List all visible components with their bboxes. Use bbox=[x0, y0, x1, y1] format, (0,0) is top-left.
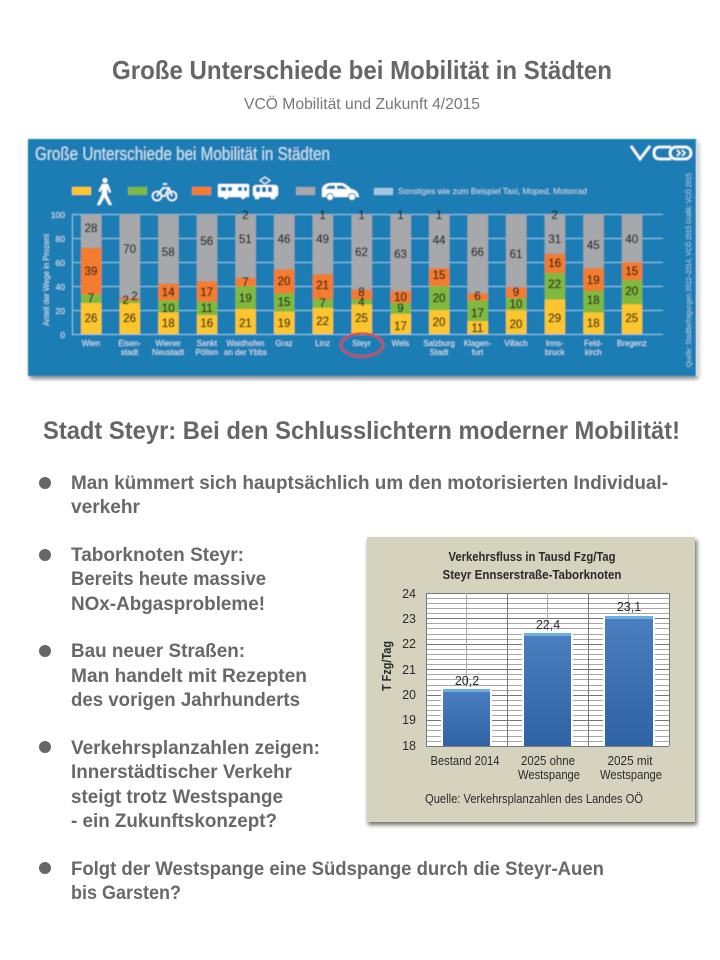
bar: Wiener Neustadt: Wiener bbox=[156, 339, 181, 348]
bar: Wels: 1 bbox=[397, 210, 404, 222]
bar: Feldkirch: 18 bbox=[587, 295, 600, 307]
bar: Salzburg: 1 bbox=[436, 210, 442, 222]
bar: Klagenfurt: 11 bbox=[472, 323, 483, 335]
bar: Villach: 20 bbox=[510, 319, 522, 331]
bar: Feldkirch: kirch bbox=[585, 348, 602, 357]
bar: Eisenstadt bbox=[118, 214, 141, 357]
legend bbox=[72, 177, 587, 205]
bar: Sankt Pölten bbox=[195, 214, 218, 357]
bar: Graz: 46 bbox=[278, 234, 290, 246]
bullet 2: NOx-Abgasprobleme! bbox=[71, 594, 265, 615]
bar: Bregenz: 20 bbox=[625, 286, 638, 298]
icon: bus bbox=[218, 184, 249, 199]
bar: Salzburg: 20 bbox=[433, 293, 445, 305]
bar: Waidhofen: an der Ybbs bbox=[224, 348, 267, 357]
bullet 2: Bereits heute massive bbox=[71, 569, 266, 590]
y axis labels: 22 bbox=[402, 637, 416, 651]
bullet 2 bbox=[39, 545, 266, 615]
bar: Wiener Neustadt: 10 bbox=[162, 303, 175, 315]
bar: Innsbruck: 2 bbox=[551, 210, 558, 222]
bar: 2025 mit Westspange: 23,1 bbox=[617, 600, 641, 614]
panel: city mobility chart bbox=[28, 139, 698, 379]
icon: pedestrian bbox=[97, 178, 112, 205]
bar: Wiener Neustadt bbox=[152, 214, 185, 357]
y axis labels: 23 bbox=[402, 612, 416, 626]
axis and grid: 60 bbox=[56, 258, 65, 268]
bar: Bestand 2014 bbox=[441, 674, 492, 746]
bar: Bregenz: 40 bbox=[625, 234, 638, 246]
bar: Sankt Pölten: 11 bbox=[201, 303, 213, 315]
bullet 5: Folgt der Westspange eine Südspange durch die Steyr-Auen bbox=[71, 859, 604, 880]
bar: Wien: 39 bbox=[85, 266, 97, 278]
bar: Wiener Neustadt: Neustadt bbox=[152, 348, 185, 357]
bullet 3: des vorigen Jahrhunderts bbox=[71, 690, 300, 711]
title: Große Unterschiede bei Mobilität in Städten bbox=[112, 55, 612, 85]
bullet 3: Bau neuer Straßen: bbox=[71, 641, 245, 662]
panel: traffic flow chart bbox=[367, 537, 697, 825]
bullet 4: - ein Zukunftskonzept? bbox=[71, 811, 277, 832]
plot grid bbox=[426, 593, 670, 746]
y axis labels: 20 bbox=[402, 688, 416, 702]
y axis labels bbox=[402, 587, 416, 753]
bar: Wien: 26 bbox=[85, 313, 97, 325]
axis and grid: 40 bbox=[56, 282, 65, 292]
bar: Klagenfurt: 66 bbox=[471, 247, 484, 259]
bullet 5: bis Garsten? bbox=[71, 883, 181, 904]
bar: Bregenz bbox=[617, 214, 647, 348]
bar: Villach: 61 bbox=[510, 249, 522, 261]
bar: Steyr bbox=[352, 210, 372, 348]
bullet 4: steigt trotz Westspange bbox=[71, 787, 283, 808]
bar: Wiener Neustadt: 58 bbox=[162, 247, 175, 259]
bar: Graz: 20 bbox=[278, 276, 290, 288]
bar: Bestand 2014: 20,2 bbox=[455, 674, 479, 688]
bar: Wien: 28 bbox=[85, 223, 97, 235]
axis and grid: 20 bbox=[56, 306, 65, 316]
icon: tram bbox=[253, 177, 278, 199]
chart title: Große Unterschiede bei Mobilität in Städten bbox=[35, 144, 330, 164]
bar: Salzburg: Stadt bbox=[430, 348, 449, 357]
bullet 1: verkehr bbox=[71, 497, 141, 518]
bar: Feldkirch bbox=[583, 214, 604, 357]
bar: Wels: 63 bbox=[394, 249, 407, 261]
bar: Bregenz: Bregenz bbox=[617, 339, 647, 348]
y axis labels: 21 bbox=[402, 663, 416, 677]
bar: Linz: 1 bbox=[319, 210, 326, 222]
bar: Villach: Villach bbox=[504, 339, 528, 348]
bar: Linz: 22 bbox=[316, 316, 329, 328]
bar: Innsbruck: bruck bbox=[545, 348, 565, 357]
bar: Graz: Graz bbox=[275, 339, 293, 348]
bar: Innsbruck: 29 bbox=[548, 313, 561, 325]
y axis labels: 19 bbox=[402, 713, 416, 727]
bar: Waidhofen: 51 bbox=[239, 234, 252, 246]
bar: Klagenfurt: furt bbox=[472, 348, 484, 357]
bullet 4: Innerstädtischer Verkehr bbox=[71, 762, 293, 783]
bar: Waidhofen: 7 bbox=[242, 277, 249, 289]
bar: Salzburg: 20 bbox=[433, 317, 445, 329]
x axis labels: Westspange bbox=[518, 768, 580, 782]
bar: Wiener Neustadt: 14 bbox=[162, 287, 175, 299]
bar: Bregenz: 25 bbox=[625, 313, 638, 325]
y axis labels: 24 bbox=[402, 587, 416, 601]
bar: Sankt Pölten: 56 bbox=[200, 236, 213, 248]
bullet 1: Man kümmert sich hauptsächlich um den motorisierten Individual- bbox=[71, 473, 668, 494]
bar: Linz: 49 bbox=[316, 234, 329, 246]
x axis labels: Westspange bbox=[600, 768, 662, 782]
bar: Feldkirch: 19 bbox=[587, 275, 600, 287]
source note: Quelle: Stadtbefragungen 2012–2014, VCÖ 2015 Grafik: VCÖ 2015 bbox=[685, 173, 693, 367]
bar: Salzburg: Salzburg bbox=[423, 339, 455, 348]
bar: Wien: 7 bbox=[88, 293, 94, 305]
bar: Klagenfurt bbox=[464, 214, 492, 357]
bullet 3: Man handelt mit Rezepten bbox=[71, 666, 307, 687]
bar: Sankt Pölten: 16 bbox=[200, 318, 213, 330]
bar: Villach bbox=[504, 214, 528, 348]
bar: 2025 ohne Westspange bbox=[522, 618, 573, 746]
bar: Eisenstadt: Eisen- bbox=[118, 339, 141, 348]
bar: Steyr: 4 bbox=[358, 297, 365, 309]
heading: Stadt Steyr: Bei den Schlusslichtern moderner Mobilität! bbox=[43, 417, 680, 445]
icon: bicycle bbox=[152, 184, 176, 200]
bullet 2: Taborknoten Steyr: bbox=[71, 545, 244, 566]
bar: Wels: Wels bbox=[392, 339, 409, 348]
bar: Klagenfurt: 17 bbox=[471, 308, 484, 320]
source note: Quelle: Verkehrsplanzahlen des Landes OÖ bbox=[425, 792, 643, 806]
bar: Waidhofen bbox=[224, 210, 267, 357]
bar: Waidhofen: 19 bbox=[239, 293, 252, 305]
bar: Steyr: 1 bbox=[358, 210, 365, 222]
bar: Klagenfurt: Klagen- bbox=[464, 339, 492, 348]
bar: Waidhofen: Waidhofen bbox=[226, 339, 264, 348]
axis and grid: 80 bbox=[56, 234, 65, 244]
bar: Feldkirch: Feld- bbox=[584, 339, 603, 348]
y axis labels: 18 bbox=[402, 739, 416, 753]
bar: Graz: 15 bbox=[278, 297, 290, 309]
bar: Linz bbox=[313, 210, 333, 348]
bar: Steyr: 62 bbox=[355, 247, 368, 259]
bar: Linz: 21 bbox=[316, 280, 329, 292]
x axis labels: Bestand 2014 bbox=[430, 754, 500, 768]
x axis labels: 2025 ohne bbox=[521, 754, 575, 768]
bar: Villach: 10 bbox=[510, 299, 522, 311]
icon: VCÖ logo bbox=[631, 146, 691, 159]
bar: Wels bbox=[390, 210, 411, 348]
bar: Linz: 7 bbox=[319, 298, 326, 310]
bar: Eisenstadt: 2 bbox=[131, 291, 138, 303]
bar: Salzburg: 44 bbox=[433, 235, 446, 247]
bar: Innsbruck: Inns- bbox=[546, 339, 564, 348]
bar: Wels: 17 bbox=[394, 321, 407, 333]
bar: Innsbruck: 22 bbox=[548, 279, 561, 291]
bullet 3 bbox=[39, 641, 307, 711]
bar: Wien: Wien bbox=[82, 339, 100, 348]
bar: Steyr: Steyr bbox=[352, 339, 371, 348]
bar: Eisenstadt: 70 bbox=[123, 244, 136, 256]
bar: Wels: 9 bbox=[397, 303, 404, 315]
bar: Graz: 19 bbox=[278, 318, 290, 330]
axis and grid: 100 bbox=[51, 210, 65, 220]
bar: Waidhofen: 2 bbox=[242, 210, 249, 222]
bar: Salzburg: 15 bbox=[433, 270, 445, 282]
bullet 4 bbox=[39, 738, 320, 832]
bullet 1 bbox=[39, 473, 668, 518]
icon: car bbox=[322, 183, 359, 200]
bar: Klagenfurt: 6 bbox=[474, 291, 481, 303]
bar: Wiener Neustadt: 18 bbox=[162, 318, 175, 330]
y axis title: T Fzg/Tag bbox=[380, 641, 394, 691]
bar: Villach: 9 bbox=[513, 287, 519, 299]
bar: Wels: 10 bbox=[394, 292, 407, 304]
bar: Feldkirch: 45 bbox=[587, 240, 600, 252]
bar: Eisenstadt: stadt bbox=[121, 348, 139, 357]
axis and grid: Anteil der Wege in Prozent bbox=[41, 233, 51, 326]
bar: Eisenstadt: 26 bbox=[123, 313, 136, 325]
bar: Innsbruck bbox=[545, 210, 565, 357]
legend: Sonstiges wie zum Beispiel Taxi, Moped, Motorrad bbox=[398, 186, 587, 196]
bullet 5 bbox=[39, 859, 604, 904]
bar: 2025 mit Westspange bbox=[603, 600, 655, 746]
bar: Sankt Pölten: 17 bbox=[200, 287, 213, 299]
bar: Wien bbox=[81, 214, 102, 348]
bar: Innsbruck: 31 bbox=[548, 234, 561, 246]
panel: traffic flow chart: Steyr Ennserstraße-Taborknoten bbox=[442, 568, 622, 582]
bullet 4: Verkehrsplanzahlen zeigen: bbox=[71, 738, 320, 759]
x axis labels: 2025 mit bbox=[608, 754, 653, 768]
bar: Bregenz: 15 bbox=[625, 266, 638, 278]
bar: Eisenstadt: 2 bbox=[122, 295, 129, 307]
axis and grid: 0 bbox=[60, 330, 65, 340]
bar: Innsbruck: 16 bbox=[548, 258, 561, 270]
subtitle: VCÖ Mobilität und Zukunft 4/2015 bbox=[244, 95, 480, 113]
x axis labels bbox=[430, 754, 662, 782]
chart title: Verkehrsfluss in Tausd Fzg/Tag bbox=[448, 550, 616, 564]
bar: Feldkirch: 18 bbox=[587, 318, 600, 330]
bar: Steyr: 8 bbox=[358, 287, 365, 299]
bar: Graz bbox=[274, 214, 294, 348]
axis and grid bbox=[41, 210, 663, 340]
bar: Linz: Linz bbox=[315, 339, 330, 348]
callout: red ellipse around Steyr bbox=[341, 334, 383, 356]
bar: Salzburg bbox=[423, 210, 455, 357]
bar: 2025 ohne Westspange: 22,4 bbox=[536, 618, 560, 632]
bar: Sankt Pölten: Pölten bbox=[195, 348, 218, 357]
bar: Waidhofen: 21 bbox=[239, 318, 252, 330]
bar: Sankt Pölten: Sankt bbox=[197, 339, 218, 348]
bar: Steyr: 25 bbox=[355, 313, 368, 325]
